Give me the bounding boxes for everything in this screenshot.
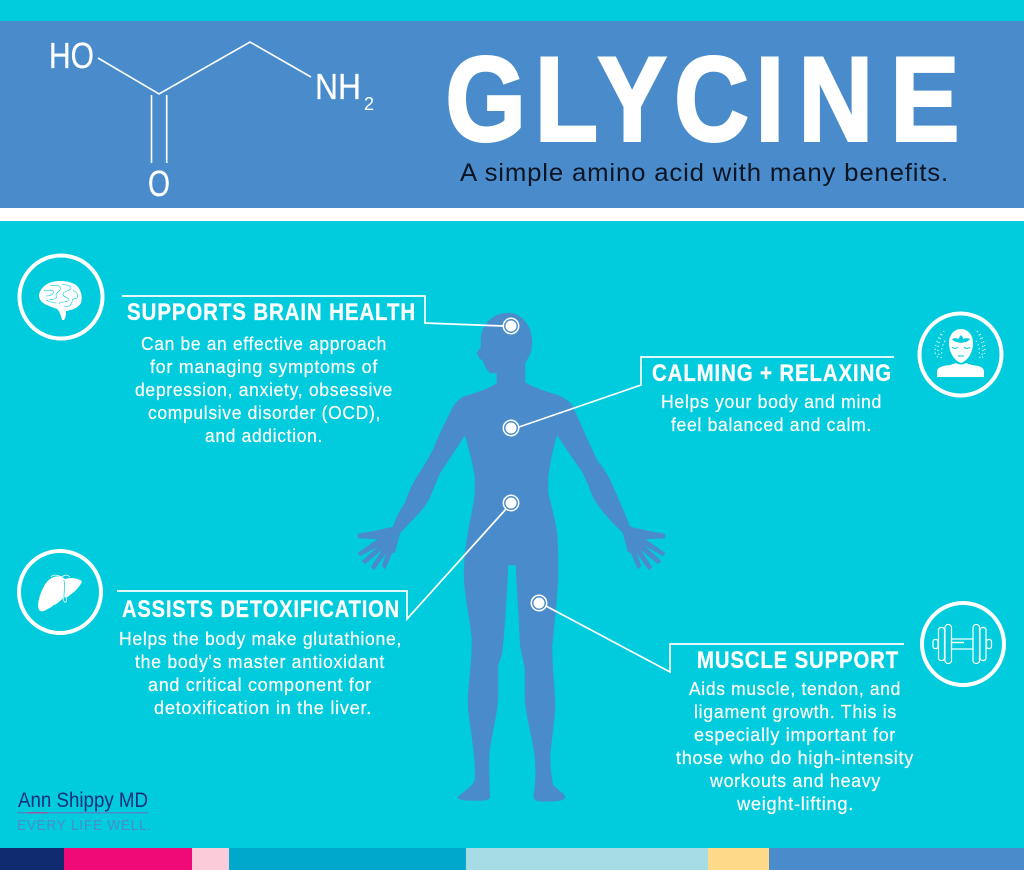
description: Helps your body and mind	[661, 392, 882, 412]
callout: supports brain health	[122, 296, 503, 446]
forehead lotus, eyes, mouth	[952, 335, 970, 343]
description: workouts and heavy	[709, 771, 881, 791]
glycine molecule structure: NH	[315, 66, 361, 107]
glycine molecule structure: O	[148, 163, 170, 204]
description: detoxification in the liver.	[154, 698, 372, 718]
heading: ASSISTS DETOXIFICATION	[122, 596, 400, 623]
heading: SUPPORTS BRAIN HEALTH	[127, 299, 416, 326]
description: weight-lifting.	[736, 794, 854, 814]
description: for managing symptoms of	[150, 357, 378, 377]
description: especially important for	[694, 725, 896, 745]
connector line to chest	[519, 357, 894, 427]
description	[676, 679, 914, 814]
callout: assists detoxification	[117, 509, 506, 718]
header banner	[0, 21, 1024, 221]
icon: calm face	[920, 314, 1002, 396]
heading: CALMING + RELAXING	[652, 360, 892, 387]
description	[119, 629, 402, 718]
connector line to abdomen	[117, 509, 506, 619]
glycine molecule structure	[49, 35, 374, 204]
mist dots	[935, 331, 985, 359]
icon: brain	[20, 256, 102, 338]
description: compulsive disorder (OCD),	[148, 403, 381, 423]
body marker dots	[503, 318, 547, 611]
description	[661, 392, 882, 435]
bottom colour strip	[0, 848, 1024, 870]
title: GLYCINE	[445, 32, 959, 166]
logo: Ann Shippy MD: EVERY LIFE WELL.	[17, 817, 152, 834]
logo: Ann Shippy MD	[17, 789, 152, 834]
description: those who do high-intensity	[676, 748, 914, 768]
description: and critical component for	[148, 675, 372, 695]
description	[135, 334, 393, 446]
icon: liver	[19, 551, 101, 633]
callout: calming and relaxing	[519, 357, 894, 435]
description: Can be an effective approach	[141, 334, 387, 354]
human body silhouette	[358, 313, 665, 801]
description: feel balanced and calm.	[671, 415, 872, 435]
icon: dumbbell	[922, 603, 1004, 685]
glycine molecule structure: 2	[364, 94, 374, 114]
description: Aids muscle, tendon, and	[689, 679, 901, 699]
heading: MUSCLE SUPPORT	[697, 647, 899, 674]
callout: muscle support	[546, 606, 914, 814]
description: ligament growth. This is	[694, 702, 897, 722]
connector line to head	[122, 296, 503, 326]
description: depression, anxiety, obsessive	[135, 380, 393, 400]
glycine molecule structure: HO	[49, 35, 94, 76]
description: and addiction.	[205, 426, 323, 446]
subtitle: A simple amino acid with many benefits.	[460, 159, 949, 187]
logo: Ann Shippy MD: Ann Shippy MD	[18, 789, 148, 812]
description: Helps the body make glutathione,	[119, 629, 402, 649]
description: the body's master antioxidant	[135, 652, 385, 672]
connector line to thigh	[546, 606, 904, 672]
head and shoulders	[937, 329, 984, 377]
